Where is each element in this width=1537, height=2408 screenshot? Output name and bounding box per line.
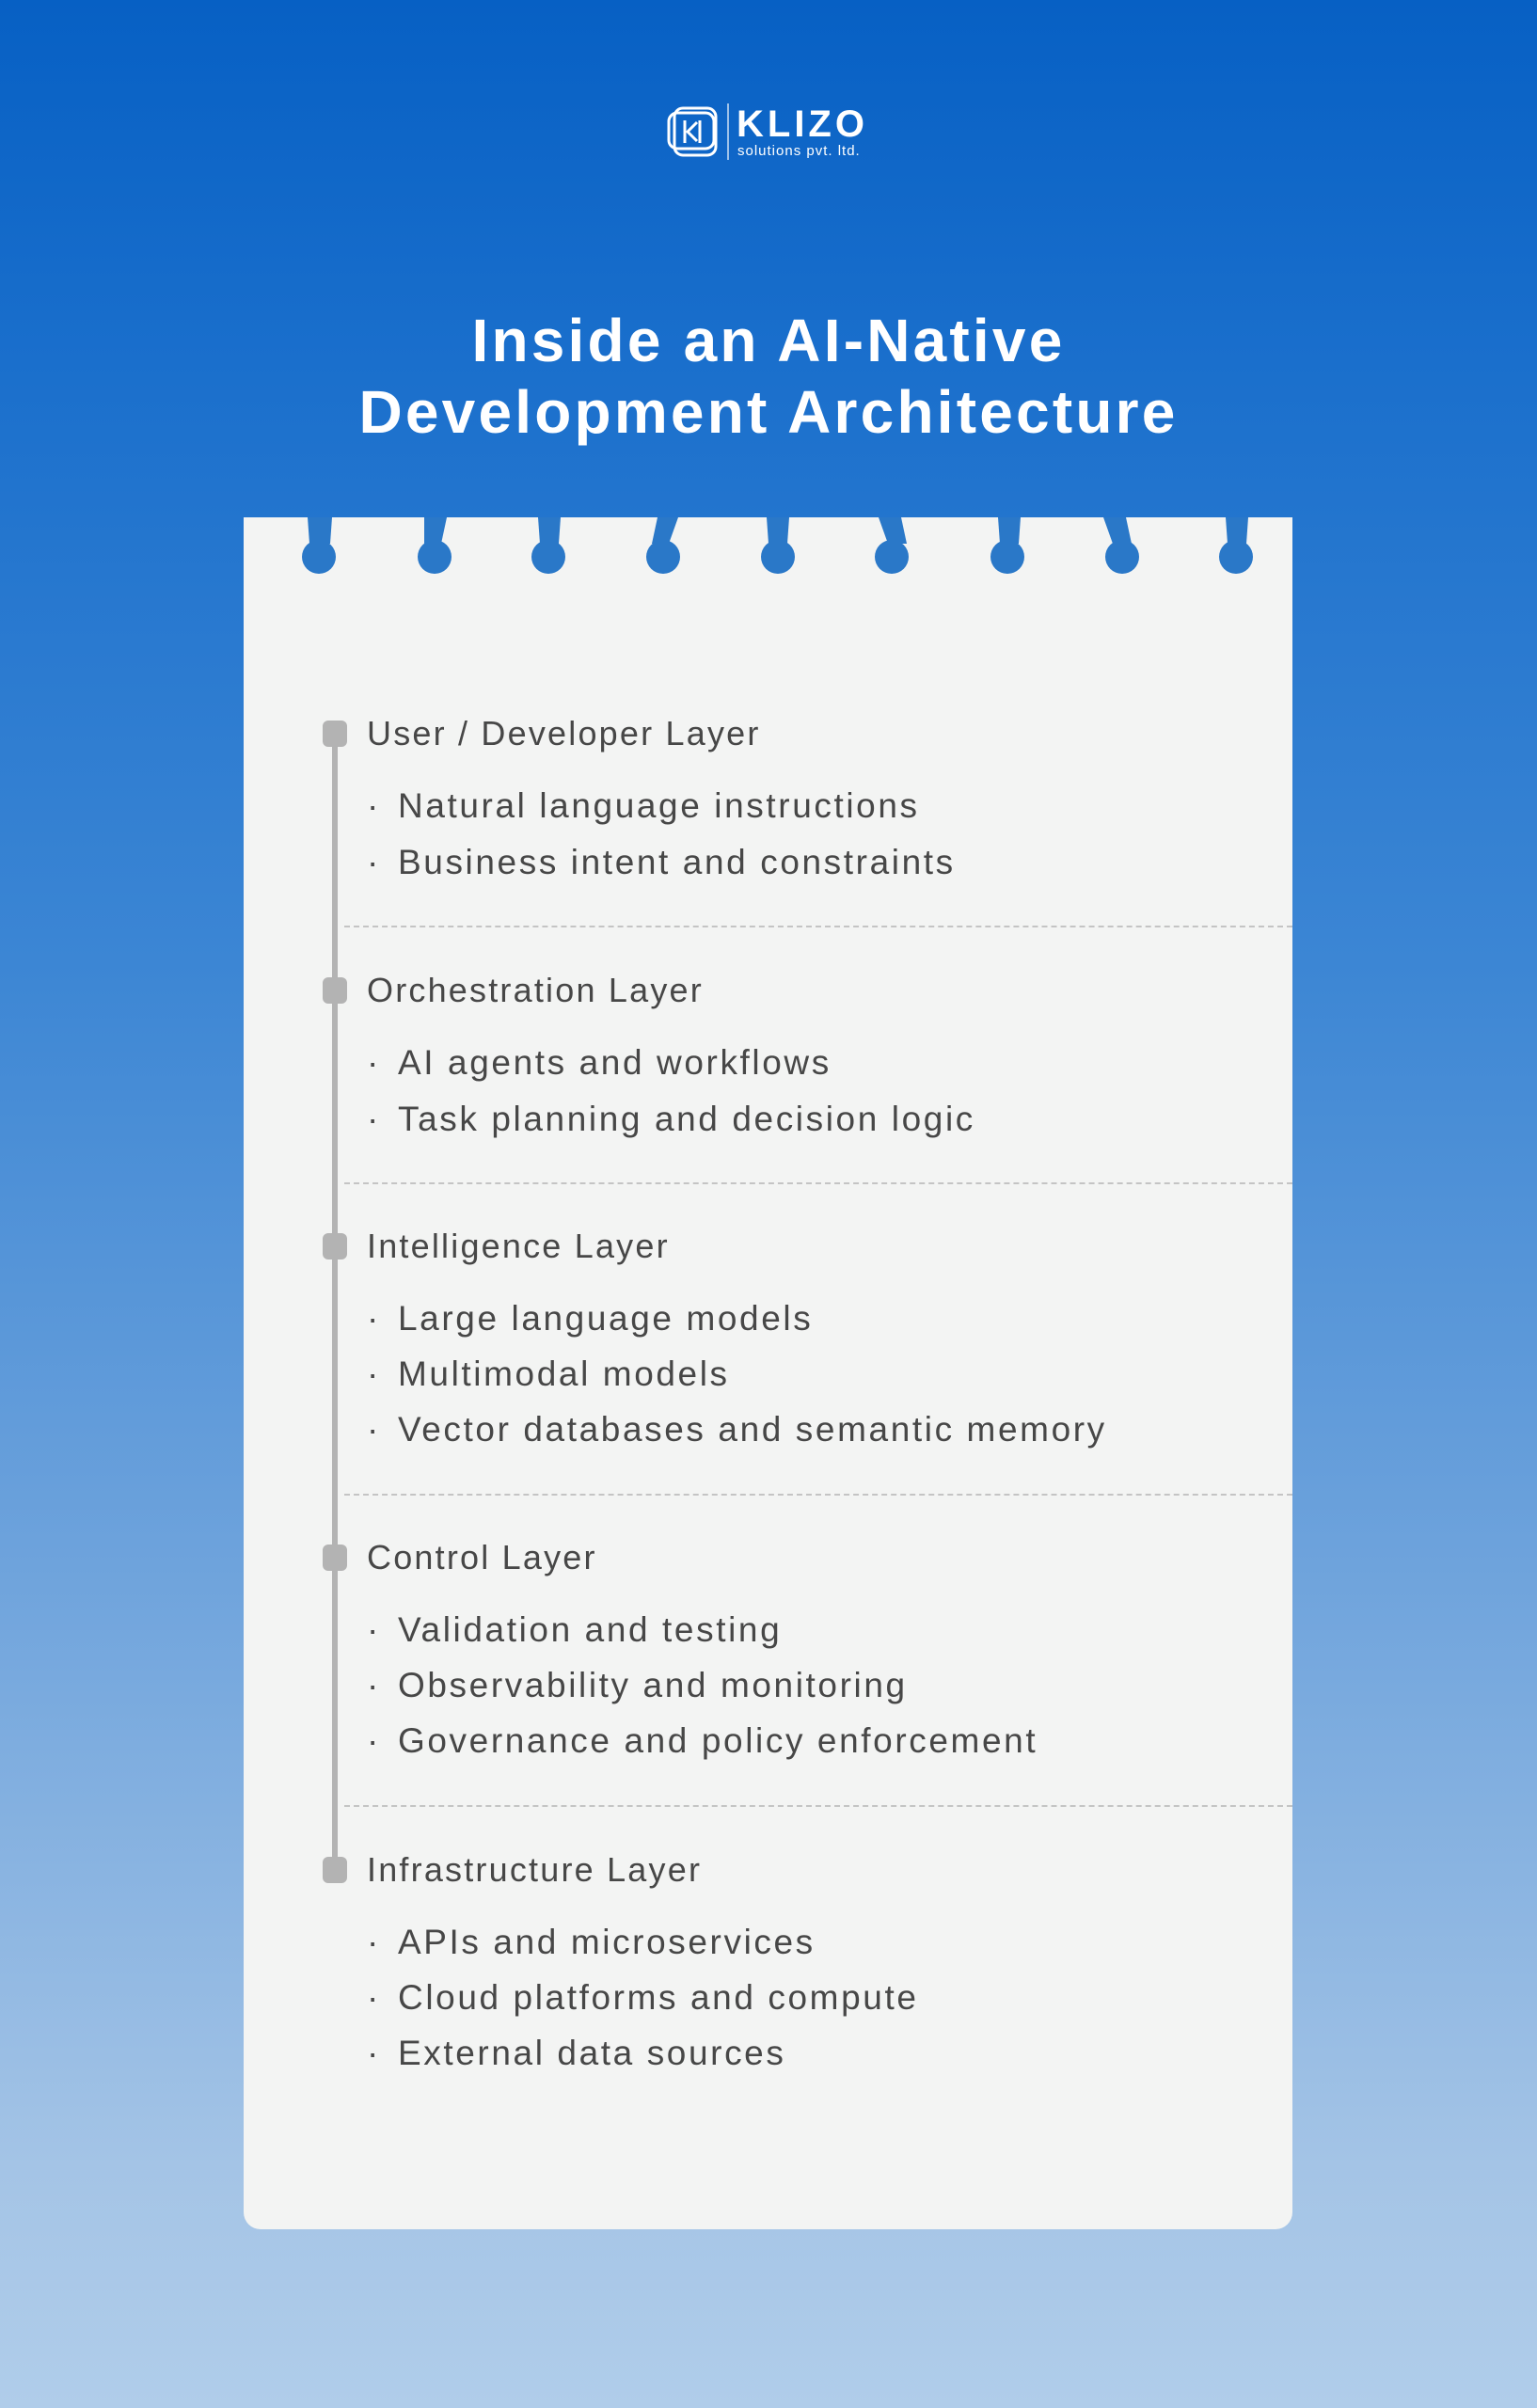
logo: solutions pvt. ltd. [737,143,861,159]
layer: intelligence: · [367,1410,381,1449]
layer: infrastructure: External data sources [398,2034,785,2072]
layer: user / developer [323,714,956,881]
logo text: KLIZO [737,103,868,145]
layer: intelligence: Multimodal models [398,1354,730,1393]
layer: user / developer: Business intent and constraints [398,843,956,881]
layer: intelligence: Vector databases and semantic memory [398,1410,1107,1449]
layer: control [323,1538,1038,1760]
layer: user / developer: User / Developer Layer [367,714,761,752]
layer: intelligence [323,1227,1107,1449]
layer: control: · [367,1666,381,1704]
title: Development Architecture [358,378,1179,446]
layer: user / developer: · [367,843,381,881]
layer: orchestration: Orchestration Layer [367,971,704,1009]
layer: control: · [367,1721,381,1760]
layer: orchestration: · [367,1043,381,1082]
panel: notepad card [244,517,1292,2229]
icon: logo mark [668,107,717,156]
timeline line [332,734,338,1870]
logo [668,103,868,160]
layer: orchestration: · [367,1100,381,1138]
layer: control: Governance and policy enforcement [398,1721,1038,1760]
layer: infrastructure [323,1850,919,2072]
title: Inside an AI-Native [471,307,1066,374]
layer: intelligence: · [367,1299,381,1338]
layer: control: Control Layer [367,1538,597,1576]
title [358,307,1179,446]
layer: control: Observability and monitoring [398,1666,908,1704]
layer: infrastructure: Infrastructure Layer [367,1850,702,1889]
layer: orchestration: Task planning and decision logic [398,1100,975,1138]
layer: infrastructure: · [367,2034,381,2072]
layer: orchestration [323,971,975,1138]
layer: intelligence: Large language models [398,1299,813,1338]
layer: infrastructure: · [367,1978,381,2017]
layer: user / developer: Natural language instructions [398,786,920,825]
layer: infrastructure: · [367,1923,381,1961]
layer: infrastructure: Cloud platforms and compute [398,1978,919,2017]
layer: intelligence: · [367,1354,381,1393]
layer: intelligence: Intelligence Layer [367,1227,670,1265]
layer: user / developer: · [367,786,381,825]
binding holes [302,517,1253,574]
layer: infrastructure: APIs and microservices [398,1923,816,1961]
layer: control: Validation and testing [398,1610,782,1649]
layer: control: · [367,1610,381,1649]
layer: orchestration: AI agents and workflows [398,1043,832,1082]
